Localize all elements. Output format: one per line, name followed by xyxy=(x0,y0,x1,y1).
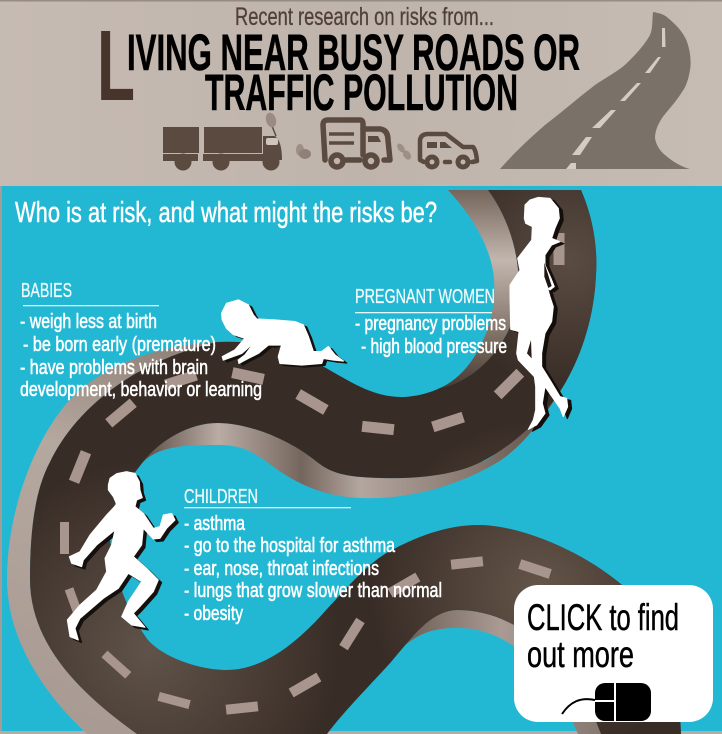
road edge: arch underside xyxy=(143,390,561,498)
road surface xyxy=(30,190,681,734)
text block: babies: development, behavior or learning xyxy=(20,378,262,401)
text block: pregnant women: - high blood pressure xyxy=(361,335,507,358)
text block: babies: BABIES xyxy=(21,279,72,302)
icon: truck xyxy=(163,111,282,170)
section heading: Who is at risk, and what might the risks be? xyxy=(15,197,437,229)
text block: children: - asthma xyxy=(184,512,245,535)
text block: children: - ear, nose, throat infections xyxy=(184,557,379,580)
icon: car xyxy=(420,134,477,167)
title line 2: TRAFFIC POLLUTION xyxy=(205,64,518,121)
text block: pregnant women xyxy=(355,285,507,358)
call to action box: out more xyxy=(527,634,634,675)
text block: children xyxy=(184,485,442,625)
icon: smoke puff 1 xyxy=(296,144,311,159)
text block: babies xyxy=(20,279,262,401)
title drop cap L: L xyxy=(97,10,135,122)
road edge: left outer band xyxy=(7,342,217,734)
text block: pregnant women: PREGNANT WOMEN xyxy=(355,285,495,308)
text block: babies: - weigh less at birth xyxy=(20,310,157,333)
text block: babies: - be born early (premature) xyxy=(23,333,216,356)
road edge: top right curve xyxy=(440,190,519,388)
text block: children: - lungs that grow slower than normal xyxy=(184,579,442,602)
text block: babies: - have problems with brain xyxy=(20,356,208,379)
icon: winding road xyxy=(500,12,691,169)
icon: running child silhouette xyxy=(67,472,178,643)
text block: children: - obesity xyxy=(184,602,244,625)
icon: pregnant woman silhouette xyxy=(510,197,572,431)
icon: baby silhouette xyxy=(222,300,347,367)
kicker text: Recent research on risks from... xyxy=(235,3,494,31)
text block: children: CHILDREN xyxy=(184,485,258,508)
text block: children: - go to the hospital for asthma xyxy=(184,534,395,557)
icon: computer mouse xyxy=(562,683,651,721)
icon: smoke puff 2 xyxy=(396,142,413,161)
icon: delivery van xyxy=(323,120,390,167)
road edge: lower bend xyxy=(400,610,601,734)
text block: pregnant women: - pregnancy problems xyxy=(355,312,506,335)
call to action box xyxy=(514,585,713,722)
winding road xyxy=(7,190,681,734)
header panel xyxy=(0,0,722,186)
road centre dashes xyxy=(60,233,564,715)
